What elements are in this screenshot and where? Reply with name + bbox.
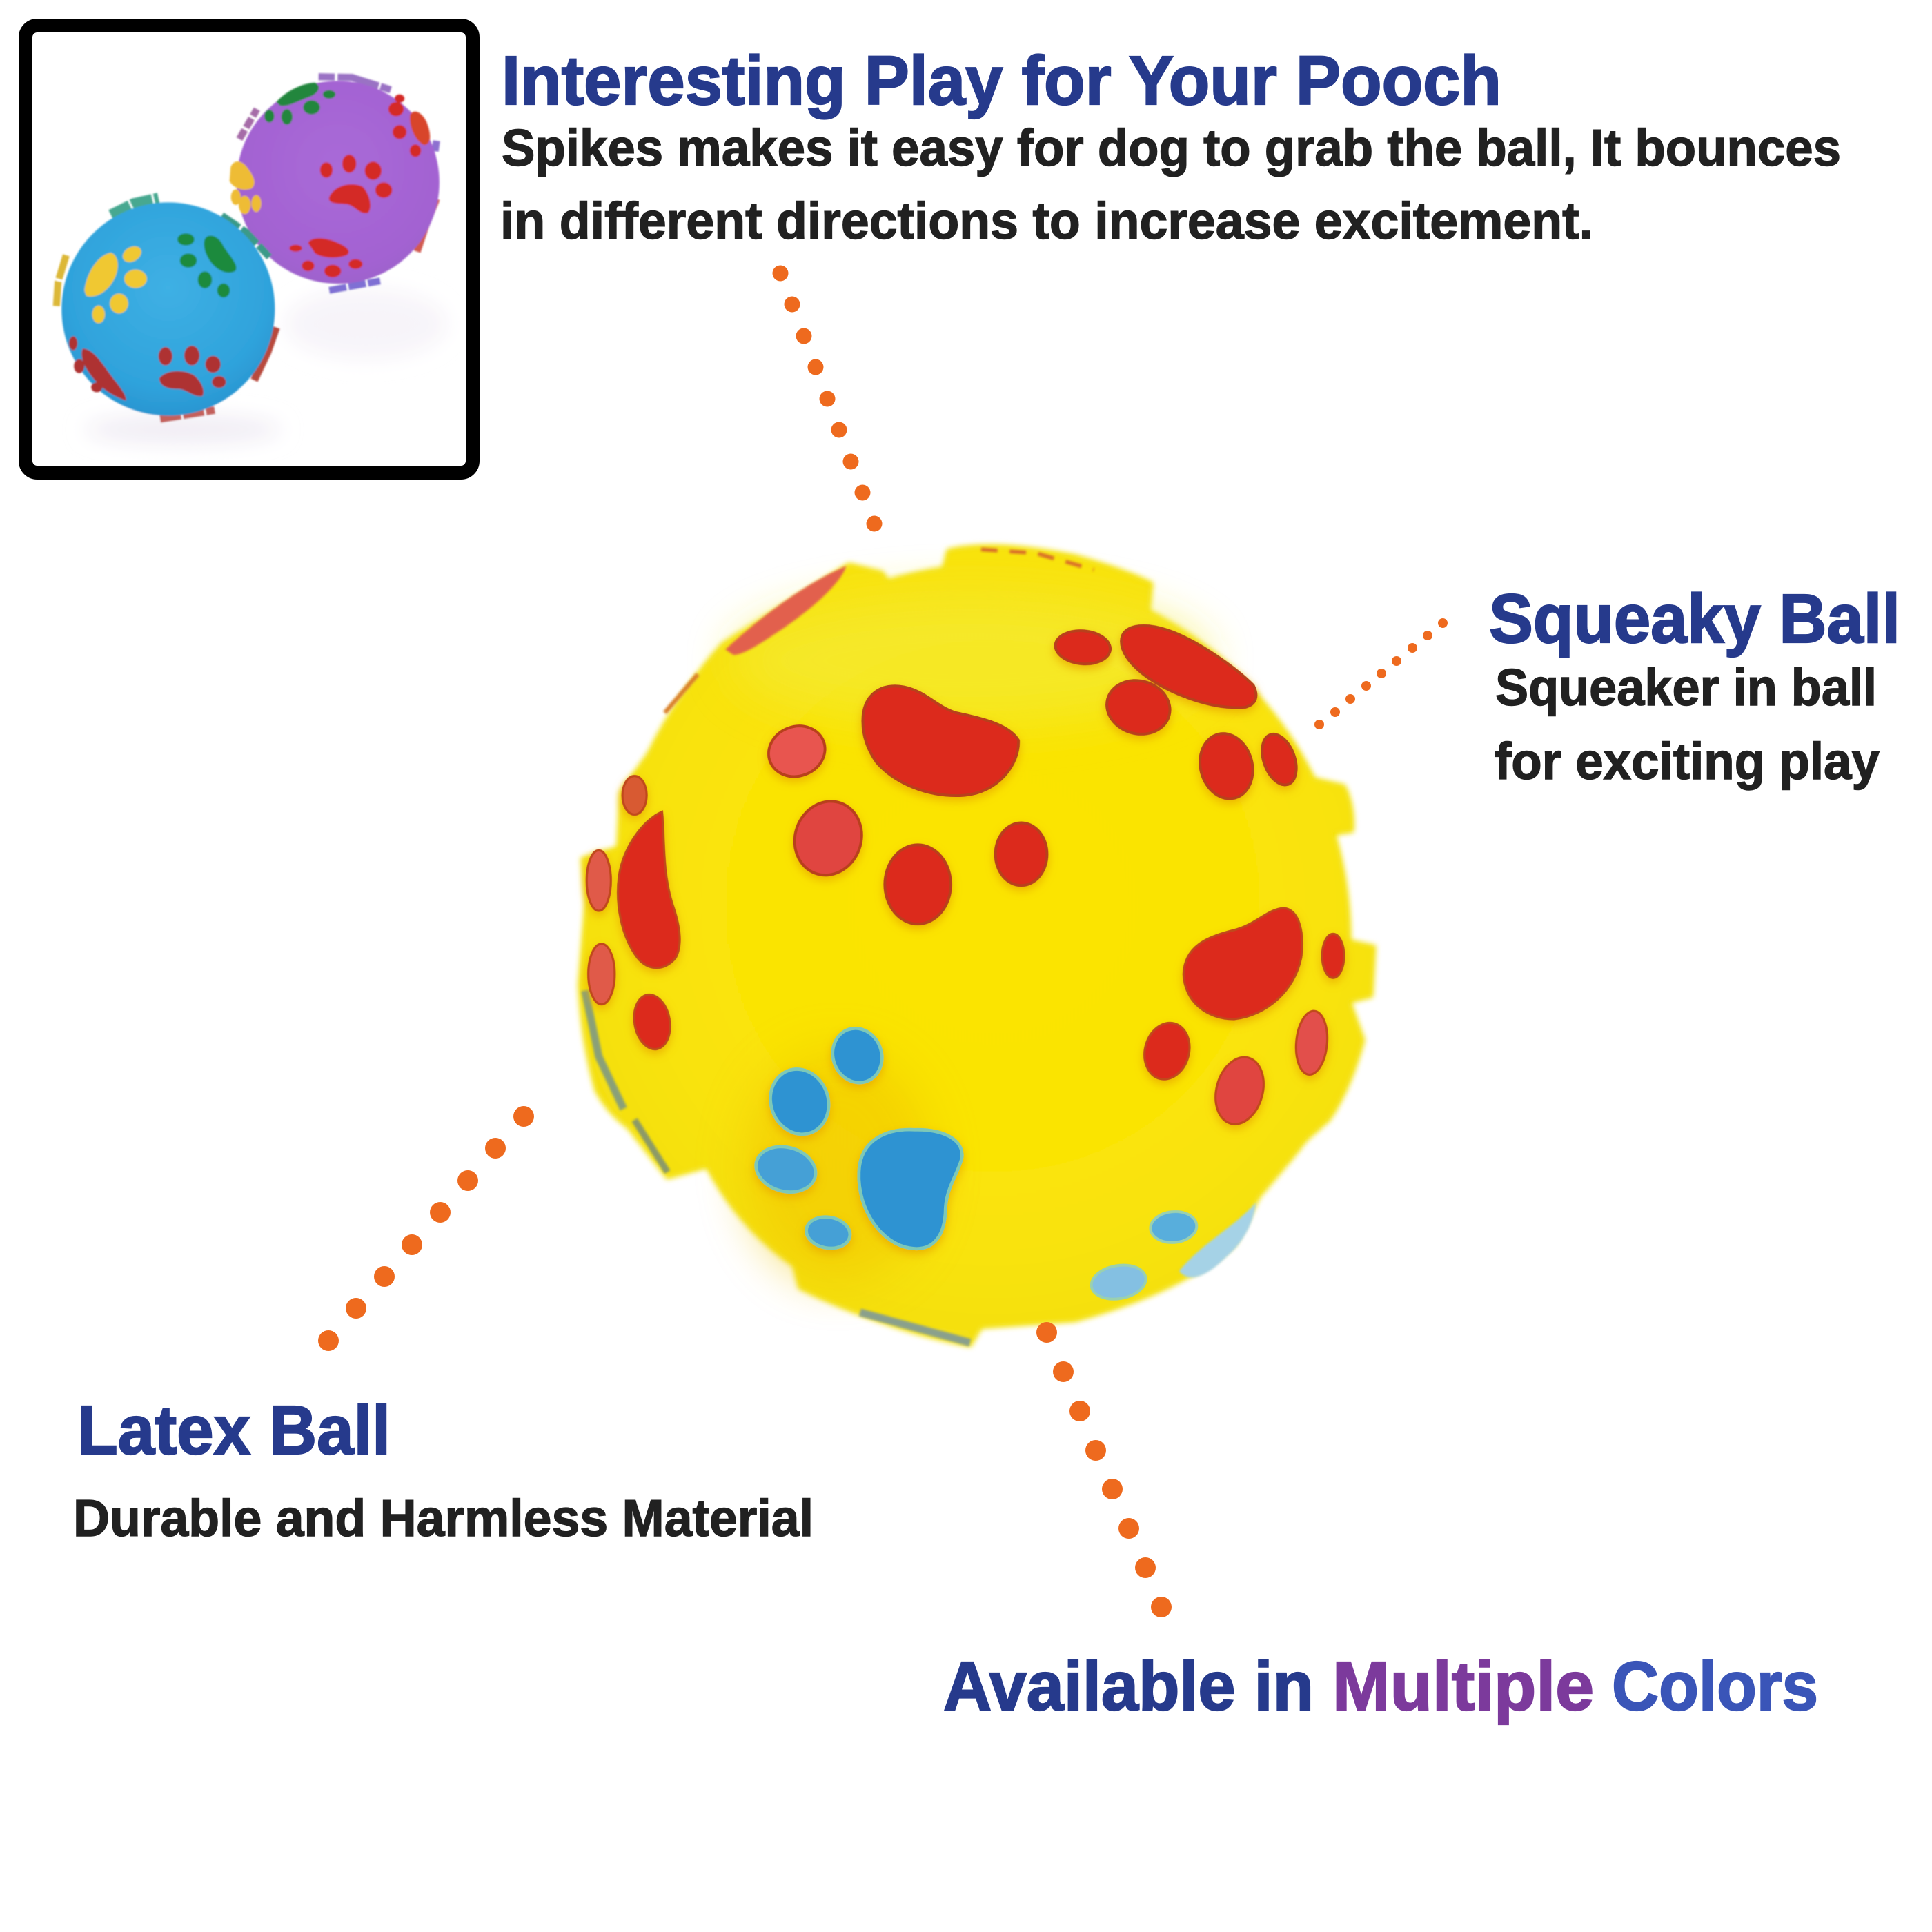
nubs xyxy=(57,198,277,419)
paw: blue xyxy=(751,1021,962,1252)
soft shadow xyxy=(84,288,447,444)
photo frame xyxy=(26,26,473,473)
paw: brown red xyxy=(69,336,226,401)
paw: red top centre xyxy=(762,686,1047,924)
edge markings xyxy=(585,549,1256,1343)
text: for exciting play: for exciting play xyxy=(1495,732,1880,790)
paws: red xyxy=(289,95,430,277)
purple ball xyxy=(230,77,440,290)
Colors: Colors xyxy=(1612,1648,1818,1725)
panel: product photo of two balls xyxy=(26,26,473,473)
paw: yellow xyxy=(230,161,262,214)
photo: blue and purple balls xyxy=(57,77,447,444)
ball body xyxy=(580,546,1374,1346)
Available in: Available in xyxy=(943,1648,1314,1725)
arrow: dotted line to top heading xyxy=(773,265,882,531)
Multiple: Multiple xyxy=(1332,1648,1594,1725)
text: Durable and Harmless Material: Durable and Harmless Material xyxy=(73,1489,814,1547)
paw: green xyxy=(177,233,236,297)
arrow: dotted line to Available in Multiple Colors xyxy=(1036,1322,1172,1617)
paw: blue bottom right xyxy=(1089,1210,1198,1303)
paw: green xyxy=(264,83,335,125)
text: spikes line 2: in different directions to increase excitement. xyxy=(500,192,1593,250)
paw: red right xyxy=(1138,908,1344,1130)
nubs xyxy=(239,77,437,290)
heading: Available in Multiple Colors xyxy=(943,1648,1818,1725)
product: yellow paw print ball xyxy=(580,546,1374,1346)
shading xyxy=(733,595,1207,1282)
blue ball xyxy=(57,198,277,419)
arrow: dotted line to Latex Ball xyxy=(318,1106,534,1351)
heading: Interesting Play for Your Pooch: Interesting Play for Your Pooch xyxy=(502,42,1501,119)
paw: yellow xyxy=(84,243,147,323)
text: spikes line 1: Spikes makes it easy for dog to grab the ball, It bounces xyxy=(502,119,1841,177)
arrow: dotted line to Squeaky Ball xyxy=(1314,618,1448,729)
text: Squeaker in ball: Squeaker in ball xyxy=(1495,658,1877,716)
paw: red left xyxy=(586,776,680,1052)
heading: Squeaky Ball: Squeaky Ball xyxy=(1489,580,1900,658)
paw: red top right xyxy=(1054,626,1303,805)
heading: Latex Ball: Latex Ball xyxy=(77,1392,391,1469)
